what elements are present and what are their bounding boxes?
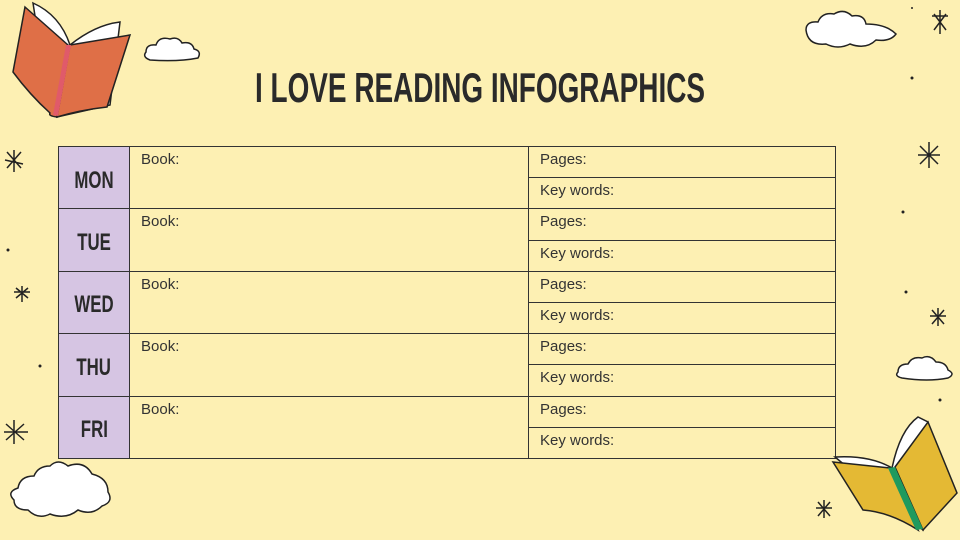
table: weekly reading log: Key words: [540,432,614,449]
table: weekly reading log: TUE [77,229,111,256]
table: weekly reading log: Pages: [540,400,587,418]
table: weekly reading log: Key words: [540,307,614,324]
table: weekly reading log: Book: [141,338,179,355]
table: weekly reading log: Pages: [540,213,587,230]
table: weekly reading log: Book: [141,400,179,418]
table: weekly reading log [58,146,836,459]
icon: orange book [12,2,131,118]
table: weekly reading log: Key words: [540,245,614,262]
table: weekly reading log: Book: [141,213,179,230]
table: weekly reading log: Pages: [540,151,587,168]
table: weekly reading log: Pages: [540,338,587,355]
table: weekly reading log: Book: [141,151,179,168]
table: weekly reading log: Key words: [540,369,614,386]
table: weekly reading log: Book: [141,276,179,293]
table: weekly reading log: WED [74,291,114,318]
table: weekly reading log: MON [74,167,114,194]
table: weekly reading log: FRI [80,416,108,443]
table: weekly reading log: Key words: [540,182,614,199]
table: weekly reading log: THU [77,354,111,381]
table: weekly reading log: Pages: [540,276,587,293]
title: I LOVE READING INFOGRAPHICS [255,64,705,111]
